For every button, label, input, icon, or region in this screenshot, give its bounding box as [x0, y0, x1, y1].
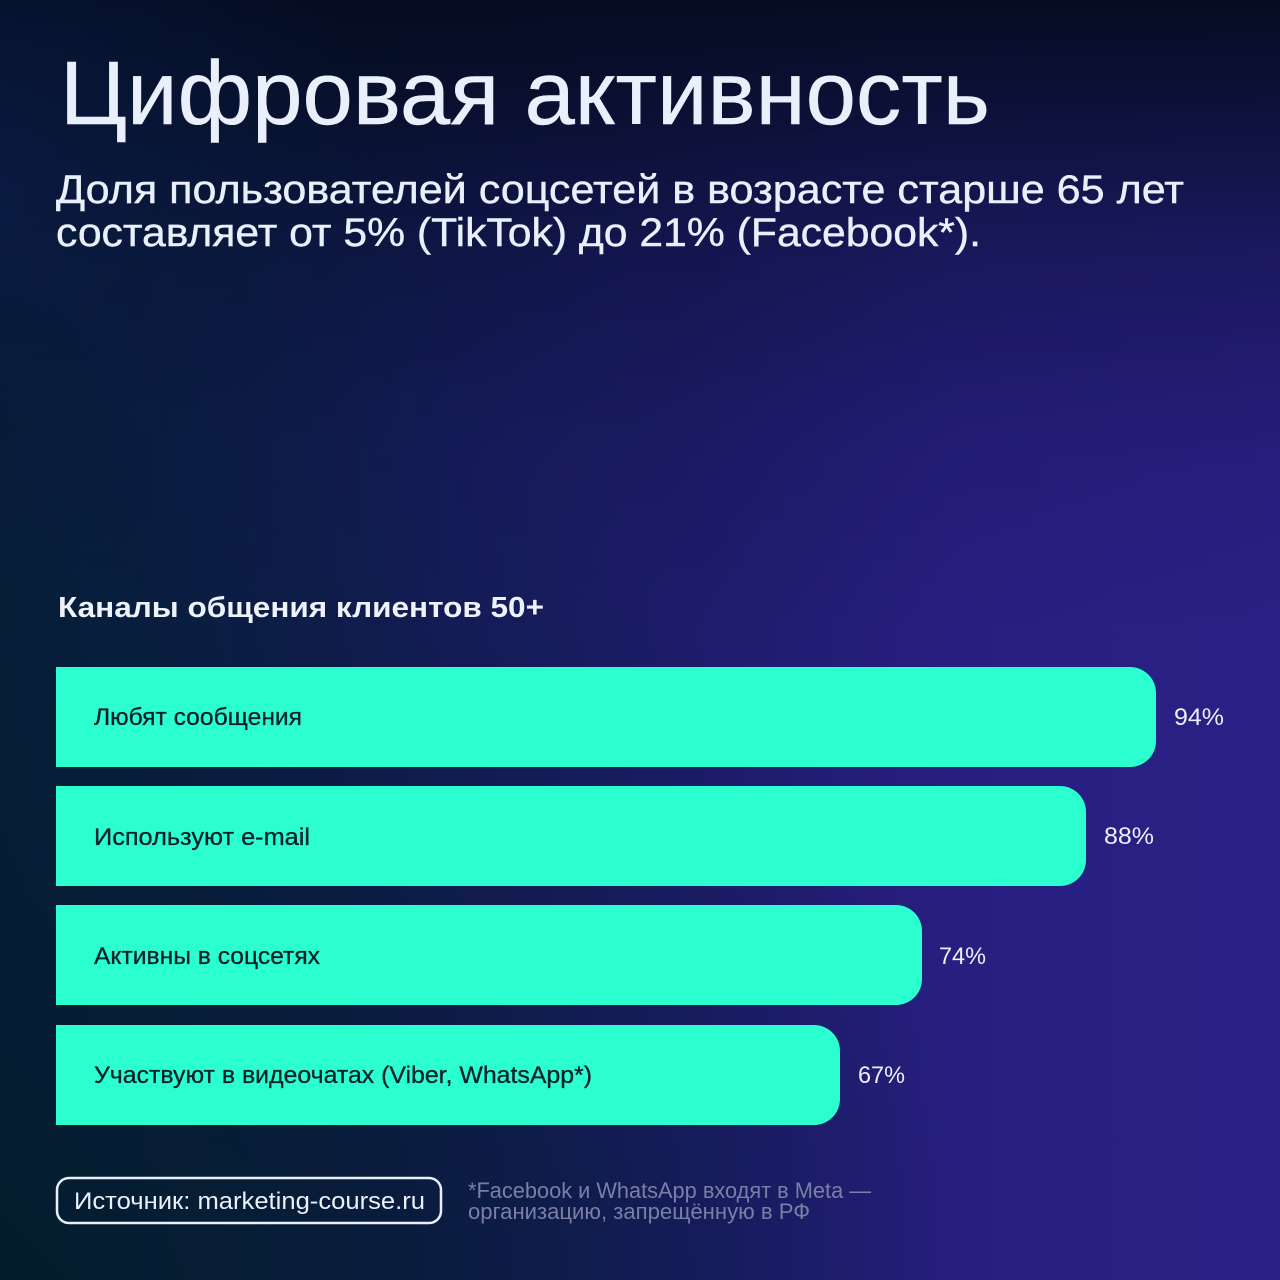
- bar: video chats 67%: Участвуют в видеочатах (Viber, WhatsApp*): [94, 1062, 592, 1089]
- bar: e-mail 88%: 88%: [1104, 823, 1154, 850]
- subtitle: составляет от 5% (TikTok) до 21% (Facebook*).: [56, 211, 981, 255]
- bar: messages 94%: [56, 667, 1224, 767]
- footnote: организацию, запрещённую в РФ: [468, 1199, 810, 1224]
- bar: social networks 74%: Активны в соцсетях: [94, 943, 320, 970]
- source badge: [57, 1178, 441, 1223]
- source badge: Источник: marketing-course.ru: [74, 1188, 425, 1215]
- bar: video chats 67%: [56, 1025, 905, 1125]
- bar chart: [56, 667, 1224, 1125]
- subtitle: [56, 168, 1184, 255]
- footnote: [468, 1178, 871, 1224]
- bar: social networks 74%: 74%: [939, 943, 986, 970]
- bar: social networks 74%: [56, 905, 986, 1005]
- chart heading: Каналы общения клиентов 50+: [58, 592, 544, 624]
- bar: video chats 67%: 67%: [858, 1062, 905, 1089]
- title: Цифровая активность: [60, 44, 990, 144]
- bar: messages 94%: Любят сообщения: [94, 704, 302, 731]
- footnote: *Facebook и WhatsApp входят в Meta —: [468, 1178, 871, 1203]
- bar: e-mail 88%: [56, 786, 1154, 886]
- subtitle: Доля пользователей соцсетей в возрасте старше 65 лет: [56, 168, 1184, 212]
- bar: e-mail 88%: Используют e-mail: [94, 824, 310, 851]
- bar: messages 94%: 94%: [1174, 704, 1224, 731]
